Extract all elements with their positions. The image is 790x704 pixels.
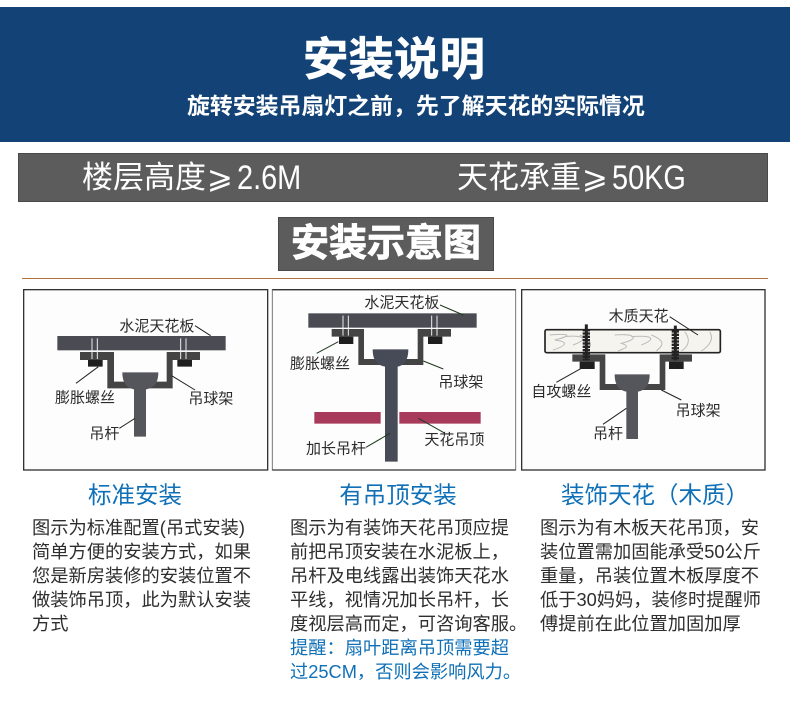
ceiling slab <box>308 313 477 328</box>
labels: 吊球架 <box>188 391 233 408</box>
text: wood ceiling: 低于30妈妈，装修时提醒师 <box>540 589 761 610</box>
labels: 加长吊杆 <box>306 441 366 458</box>
labels: 自攻螺丝 <box>531 383 591 400</box>
labels: 水泥天花板 <box>364 294 439 312</box>
labels: 吊球架 <box>676 402 721 419</box>
subtitle: 旋转安装吊扇灯之前，先了解天花的实际情况 <box>187 93 645 119</box>
wood grain <box>550 332 711 351</box>
heading: standard: 标准安装 <box>88 482 182 508</box>
ball cup and rod <box>122 372 158 437</box>
suspended ceiling panels <box>314 412 481 424</box>
ball cup and rod <box>615 374 650 439</box>
section heading <box>278 217 494 271</box>
bracket <box>80 352 200 388</box>
diagram: suspended ceiling installation <box>272 289 516 471</box>
labels <box>290 294 484 458</box>
text: standard: 图示为标准配置(吊式安装) <box>32 517 245 538</box>
labels: 木质天花 <box>609 308 669 325</box>
text: suspended ceiling: 度视层高而定，可咨询客服。 <box>290 613 527 634</box>
text: wood ceiling <box>540 517 761 634</box>
text: wood ceiling: 装位置需加固能承受50公斤 <box>540 541 761 562</box>
divider <box>22 278 768 279</box>
text: standard: 简单方便的安装方式，如果 <box>32 541 251 562</box>
labels: 膨胀螺丝 <box>290 356 350 373</box>
bolts <box>92 338 186 359</box>
labels: 吊杆 <box>593 426 623 443</box>
labels: 吊球架 <box>438 374 483 391</box>
text: wood ceiling: 傅提前在此位置加固加厚 <box>540 613 741 634</box>
header banner <box>0 7 790 142</box>
labels: 膨胀螺丝 <box>55 390 115 407</box>
text: suspended ceiling: 提醒：扇叶距离吊顶需要超 <box>290 637 509 658</box>
heading: suspended ceiling: 有吊顶安装 <box>339 482 457 508</box>
text: suspended ceiling: 前把吊顶安装在水泥板上， <box>290 541 509 562</box>
ceiling load requirement <box>457 159 686 197</box>
screws <box>586 324 675 360</box>
text: suspended ceiling: 过25CM，否则会影响风力。 <box>290 661 521 682</box>
labels <box>531 308 721 443</box>
text: standard: 您是新房装修的安装位置不 <box>32 565 251 586</box>
leader lines <box>76 326 211 428</box>
floor height requirement: 楼层高度 <box>82 160 206 195</box>
diagram: standard installation <box>23 289 268 471</box>
bracket <box>332 329 451 365</box>
text: standard: 方式 <box>32 613 68 634</box>
title: 安装说明 <box>303 34 485 85</box>
ceiling load requirement: ⩾ <box>582 160 608 196</box>
floor height requirement: 2.6M <box>237 159 301 197</box>
bracket <box>572 354 692 390</box>
nuts <box>339 337 442 344</box>
requirements bar <box>18 153 768 202</box>
text: wood ceiling: 图示为有木板天花吊顶，安 <box>540 517 759 538</box>
leader lines <box>556 317 698 424</box>
heading: wood ceiling: 装饰天花（木质） <box>561 482 749 508</box>
floor height requirement: ⩾ <box>207 160 233 196</box>
text: suspended ceiling: 吊杆及电线露出装饰天花水 <box>290 565 509 586</box>
ceiling load requirement: 天花承重 <box>457 160 581 195</box>
text: suspended ceiling: 平线，视情况加长吊杆，长 <box>290 589 509 610</box>
leader lines <box>317 305 463 447</box>
wood board <box>545 330 720 353</box>
text: wood ceiling: 重量，吊装位置木板厚度不 <box>540 565 759 586</box>
bolts <box>343 316 437 336</box>
ceiling load requirement: 50KG <box>612 159 686 197</box>
labels: 吊杆 <box>89 426 119 443</box>
text: suspended ceiling: 图示为有装饰天花吊顶应提 <box>290 517 509 538</box>
text: standard: 做装饰吊顶，此为默认安装 <box>32 589 251 610</box>
diagram: wood ceiling installation <box>521 289 766 471</box>
labels: 水泥天花板 <box>119 317 194 335</box>
floor height requirement <box>82 159 301 197</box>
labels: 天花吊顶 <box>424 431 484 448</box>
nuts <box>88 360 192 367</box>
nuts <box>580 362 684 369</box>
ball cup and extended rod <box>373 349 408 462</box>
text: standard <box>32 517 251 634</box>
section heading: 安装示意图 <box>291 223 481 265</box>
text: suspended ceiling <box>290 517 527 682</box>
labels <box>55 317 233 443</box>
ceiling slab <box>57 336 226 350</box>
